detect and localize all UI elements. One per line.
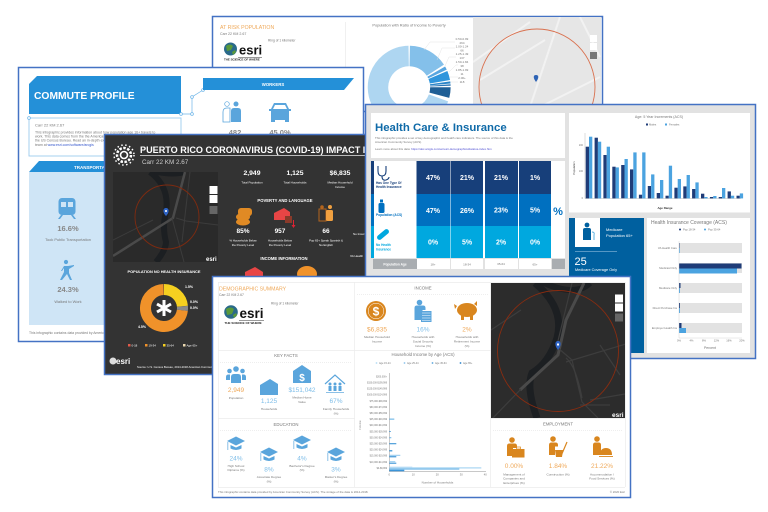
chart: age in 5 year increments: Females — [669, 122, 680, 126]
chart: household income by age: $15,000-$19,999 — [370, 456, 388, 458]
panel: health care and insurance — [366, 104, 756, 358]
chart: household income by age: 0 — [389, 472, 391, 476]
row labels: Health Insurance — [376, 185, 402, 189]
chart: health insurance coverage: 8% — [702, 338, 707, 342]
section: employment: Management of — [503, 472, 525, 476]
footnote: This infographic contains data provided by American Community Survey (ACS). The vintage of the data is 2014-2018. — [218, 490, 369, 494]
chart: household income by age: $100,000-$124,999 — [367, 395, 388, 397]
section: employment: Companies and — [503, 476, 525, 480]
section: education: 4% — [297, 456, 307, 462]
icon: coins — [236, 208, 252, 226]
section: employment: Food Services (%) — [589, 476, 615, 480]
chart: age in 5 year increments — [569, 113, 750, 212]
table footer: population age: 18-34 — [463, 262, 471, 266]
table: coverage by age: 0% — [530, 240, 541, 246]
chart: health insurance coverage: 20% — [739, 338, 745, 342]
section: key facts: 2,949 — [228, 387, 245, 394]
table: coverage by age: 5% — [462, 240, 473, 246]
text box: description: This infographic provides information about how population age 16+ travels to — [35, 130, 155, 134]
section: key facts: KEY FACTS — [274, 353, 298, 358]
text box: description: team at www.esri.com/software/arcgis — [35, 143, 94, 147]
donut labels: 0.0% — [190, 306, 199, 310]
panel: commute profile — [18, 68, 364, 342]
map controls — [210, 186, 218, 214]
map: light basemap — [473, 17, 601, 104]
icon: house income — [245, 267, 263, 280]
stat: spanish: Pop 65+ Speak Spanish & — [309, 238, 343, 242]
section: key facts — [220, 353, 352, 416]
section: employment: Enterprises (%) — [503, 481, 525, 485]
header: health care: Health Care & Insurance — [375, 122, 507, 134]
icon: home value: $ — [299, 373, 305, 384]
section: employment: EMPLOYMENT — [543, 422, 573, 426]
icon: person with document — [414, 300, 432, 322]
chart: household income by age: Age 65+ — [463, 362, 473, 365]
text: ring: Ring of 1 kilometer — [271, 302, 299, 306]
map: dark basemap: esri — [612, 412, 624, 419]
table: coverage by age: 2% — [496, 240, 507, 246]
map: dark basemap — [113, 172, 218, 263]
table: coverage by age: 47% — [426, 175, 441, 182]
chart labels: 1.00-1.24 — [456, 44, 469, 48]
stat: poverty households: % Households Below — [229, 238, 258, 242]
stat: households: 1,125 — [286, 170, 304, 177]
stat: income — [327, 170, 353, 189]
stat: public transportation — [45, 224, 91, 242]
stat: households below: Households Below — [268, 238, 293, 242]
stat: spanish: 66 — [322, 228, 330, 235]
stat: households — [283, 170, 307, 184]
header: health care — [371, 113, 565, 158]
stat: spanish — [309, 228, 343, 247]
chart: health insurance coverage: Pop 18-34 — [683, 228, 696, 232]
section: employment — [493, 422, 623, 485]
chart: age in 5 year increments: 0 — [582, 197, 584, 200]
panel: demographic summary — [212, 276, 630, 498]
icon: family house — [325, 375, 345, 393]
section: employment: 1.84% — [549, 463, 567, 470]
chart labels: 118 — [460, 80, 465, 84]
chart: household income by age: Age 45-64 — [435, 362, 447, 365]
stat: workers: 482 — [229, 128, 241, 137]
heading: coronavirus: PUERTO RICO CORONAVIRUS (COVID-19) IMPACT IN — [140, 145, 372, 155]
chart: health insurance coverage: Pop 35-64 — [708, 228, 721, 232]
icons: graduation caps — [227, 436, 345, 461]
logo: esri: esri — [239, 42, 262, 58]
ribbon: transportation: TRANSPORTATION — [74, 165, 115, 170]
section: education: 8% — [264, 466, 274, 474]
stat: public transportation: 16.6% — [57, 224, 79, 233]
chart: household income by age: Number of Households — [422, 480, 454, 484]
chart: household income by age: 30 — [460, 472, 463, 476]
section: employment: Accommodation / — [590, 472, 614, 476]
section: education: 24% — [229, 456, 243, 462]
section: income — [357, 286, 488, 348]
chart: household income by age: 10 — [412, 472, 415, 476]
stat: income: Median Household — [327, 180, 353, 184]
section: employment: 21.22% — [591, 463, 613, 470]
section: income: Households with — [456, 335, 479, 339]
panel: medicare: Population 65+ — [606, 233, 633, 238]
icon: population — [226, 366, 246, 383]
heading: at risk population: AT RISK POPULATION — [220, 25, 274, 31]
chart title: Population with Ratio of Income to Poverty — [372, 22, 446, 28]
section: income: 16% — [416, 326, 430, 334]
table footer: population age: 18+ — [430, 262, 436, 266]
table footer: population age: Population Age — [383, 262, 407, 266]
chart: health insurance coverage: Medicare Only — [659, 286, 678, 290]
chart: household income by age: 40 — [484, 472, 487, 476]
stat: households: Total Households — [283, 180, 307, 184]
table: coverage by age: 23% — [494, 208, 509, 214]
chart: household income by age: $30,000-$34,999 — [370, 437, 388, 439]
copyright: © 2020 Esri — [610, 490, 625, 494]
logo: esri: THE SCIENCE OF WHERE — [224, 58, 260, 62]
table: coverage by age: % — [553, 206, 563, 218]
section: income: Retirement Income — [454, 340, 480, 344]
logo: esri — [110, 357, 130, 366]
panel: at risk population — [212, 16, 604, 112]
chart labels: 0.50-0.99 — [456, 37, 469, 41]
section: income: Income — [372, 340, 382, 344]
icon: medical star — [157, 300, 171, 316]
table: coverage by age: 0% — [428, 240, 439, 246]
heading: income information: INCOME INFORMATION — [260, 256, 308, 261]
section: education: (%) — [300, 468, 304, 472]
table: coverage by age: 47% — [426, 208, 441, 215]
source note: Source: U.S. Census Bureau, 2014-2018 American Community Survey — [137, 365, 225, 369]
text: location: Carr 22 KM 2.67 — [219, 293, 244, 297]
table footer: population age: 35-64 — [497, 262, 505, 266]
chart labels: 137 — [459, 56, 465, 60]
logo: esri: THE SCIENCE OF WHERE — [224, 321, 262, 325]
section: key facts: Median Home — [292, 396, 312, 400]
header: commute profile: COMMUTE PROFILE — [34, 91, 135, 102]
stat: walked: 24.3% — [57, 285, 79, 294]
stat: poverty households — [229, 228, 258, 247]
text: ring: Ring of 1 kilometer — [268, 38, 296, 42]
icon: elderly person — [583, 223, 594, 240]
chart: health insurance coverage: 16% — [726, 338, 732, 342]
chart: age in 5 year increments: 200 — [579, 144, 584, 147]
text: location: Carr 22 KM 2.67 — [220, 32, 246, 36]
stat: public transportation: Took Public Transportation — [45, 237, 91, 242]
chart: age in 5 year increments: Age Range — [657, 206, 673, 210]
panel: medicare — [569, 218, 644, 353]
section: income: (%) — [465, 344, 469, 348]
stat: households below: the Poverty Level — [269, 243, 292, 247]
icon: accommodation — [593, 436, 613, 457]
donut labels: 1.5% — [185, 285, 194, 289]
table footer: population age — [373, 259, 565, 269]
chart: household income by age: $10,000-$14,999 — [370, 462, 388, 464]
section: key facts: 67% — [329, 398, 343, 405]
footnote: This infographic contains data provided by American Community Survey — [29, 331, 137, 335]
icon: bottle — [378, 200, 384, 213]
chart labels: 264 — [459, 41, 465, 45]
text box: description: work. This data comes from the the American Community Survey which is — [35, 134, 149, 138]
chart: health insurance coverage: Percent — [704, 346, 716, 350]
row labels: Insurance — [376, 248, 391, 252]
table footer: population age: 65+ — [532, 262, 538, 266]
section: education: 3% — [331, 466, 341, 474]
table: coverage by age: 21% — [460, 175, 475, 182]
section: education — [220, 422, 352, 484]
legend: 19-34 — [148, 344, 156, 348]
chart: income to poverty donut — [367, 45, 452, 130]
section: education: Associate Degree — [257, 475, 281, 479]
chart: household income by age: $60,000-$74,999 — [370, 407, 388, 409]
chart: household income by age — [358, 352, 487, 484]
chart: household income by age: Household Income by Age (ACS) — [391, 352, 455, 357]
chart: household income by age: $200,000+ — [376, 376, 388, 378]
chart: household income by age: Income — [358, 420, 362, 430]
row labels: Has One Type Of — [376, 181, 402, 185]
heading: population no health insurance: POPULATION NO HEALTH INSURANCE — [128, 269, 201, 274]
chart: household income by age: Age 15-24 — [379, 362, 391, 365]
chart labels — [424, 37, 469, 84]
section: income: Social Security — [413, 340, 434, 344]
section: income: 2% — [462, 326, 472, 334]
heading: poverty and language: POVERTY AND LANGUAGE — [257, 198, 313, 203]
section: education: EDUCATION — [274, 422, 298, 427]
stat: population: 2,949 — [243, 170, 261, 177]
chart: age in 5 year increments: Age: 5 Year Increments (ACS) — [635, 115, 683, 119]
row labels: No Health — [376, 243, 391, 247]
section: education: High School — [228, 464, 245, 468]
chart labels: 38 — [460, 64, 464, 68]
panel: medicare: 25 — [574, 256, 587, 268]
row labels: Population (ACS) — [376, 213, 402, 217]
section: key facts: Households — [261, 407, 278, 411]
panel: medicare: Medicare — [606, 227, 623, 232]
chart labels: 2.00+ — [458, 76, 466, 80]
chart: household income by age: Age 25-44 — [407, 362, 419, 365]
chart: household income by age: $0-$9,999 — [377, 468, 388, 470]
text: no insurance cut off: No Insurance — [353, 232, 371, 236]
header: commute profile — [29, 76, 181, 114]
header: health care: American Community Survey (ACS). — [375, 140, 422, 144]
chart: health insurance coverage: Medicaid Only — [659, 266, 678, 270]
text box: description: the US Census Bureau. Read an in-depth explanation from the — [35, 138, 132, 142]
icon: piggy income — [297, 266, 317, 282]
legend: Age 65+ — [186, 344, 198, 348]
icon: piggy bank — [454, 301, 477, 320]
ribbon: workers: WORKERS — [262, 82, 284, 87]
table: coverage by age: 21% — [494, 175, 509, 182]
chart: household income by age: $25,000-$29,999 — [370, 444, 388, 446]
map controls — [615, 294, 623, 322]
section: income: INCOME — [414, 286, 432, 290]
chart: age in 5 year increments: Population — [572, 161, 576, 175]
section: income: Median Household — [364, 335, 390, 339]
section: income: Income (%) — [415, 344, 431, 348]
chart: household income by age: $35,000-$39,999 — [370, 431, 388, 433]
donut labels: 4.5% — [138, 325, 147, 329]
section: key facts: Population — [229, 396, 244, 400]
table: coverage by age — [371, 161, 565, 258]
row labels — [376, 181, 402, 252]
stat: spanish: No English — [319, 243, 333, 247]
icon: dollar coin: $ — [373, 304, 380, 318]
chart: health insurance coverage — [647, 218, 750, 353]
chart: household income by age: $125,000-$149,999 — [367, 389, 388, 391]
chart: uninsured donut — [143, 287, 185, 329]
stat: poverty households: the Poverty Level — [232, 243, 255, 247]
section: employment: Construction (%) — [546, 472, 570, 476]
icon: construction — [549, 436, 567, 457]
chart: health insurance coverage: VA Health Care — [658, 246, 677, 250]
header: health care: This infographic provides a set of key demographic and health care indicators. The source of this data is the — [375, 136, 513, 140]
panel: medicare: Medicare Coverage Only — [575, 268, 617, 272]
chart: household income by age: $150,000-$199,999 — [367, 382, 388, 384]
stat: population — [241, 170, 263, 184]
icon: bandage — [376, 228, 390, 241]
header: health care: Learn more about this data: https://doc.arcgis.com/en/esri-demographics/data/us-index.htm — [375, 147, 492, 151]
icon: households — [260, 379, 278, 395]
chart labels: 1.85-1.99 — [456, 68, 469, 72]
icon: car — [269, 103, 291, 122]
chart: household income by age: $75,000-$99,999 — [370, 401, 388, 403]
section: income: $6,835 — [367, 326, 387, 334]
icon: manager — [507, 437, 524, 458]
legend — [128, 344, 198, 348]
section: employment: 0.00% — [505, 463, 523, 470]
chart labels: 1.25-1.49 — [456, 52, 469, 56]
chart: household income by age: $50,000-$59,999 — [370, 413, 388, 415]
stat: population: Total Population — [241, 180, 263, 184]
logo: esri: esri — [240, 306, 264, 321]
chart labels: 66 — [460, 48, 464, 52]
map: dark basemap: esri — [206, 257, 217, 263]
stat: households below: 957 — [275, 228, 286, 235]
chart: health insurance coverage: 12% — [714, 338, 720, 342]
stat: households below — [268, 228, 293, 247]
panel: transportation — [29, 172, 179, 325]
chart: health insurance coverage: Health Insurance Coverage (ACS) — [651, 220, 727, 226]
icon: walker — [60, 260, 74, 280]
section: education: Bachelor's Degree — [289, 464, 315, 468]
logo: esri: esri — [116, 357, 130, 366]
chart: health insurance coverage: Direct Purchase Ins — [653, 306, 678, 310]
table: coverage by age: 5% — [530, 208, 541, 214]
stat: commute: 45.0% — [269, 128, 291, 137]
text: location: Carr 22 KM 2.67 — [142, 159, 189, 166]
chart: household income by age: $40,000-$44,999 — [370, 425, 388, 427]
donut labels — [138, 285, 199, 329]
icon: train — [58, 198, 76, 219]
section: education: Diploma (%) — [227, 468, 245, 472]
chart: household income by age: $45,000-$49,999 — [370, 419, 388, 421]
section: key facts: Value — [298, 400, 306, 404]
stat: walked — [54, 285, 82, 304]
heading: demographic summary: DEMOGRAPHIC SUMMARY — [219, 286, 287, 292]
map: dark basemap — [491, 281, 626, 420]
text box: description: Carr 22 KM 2.67 — [35, 122, 65, 128]
section: key facts: (%) — [334, 412, 338, 416]
stat: poverty households: 85% — [236, 228, 250, 235]
stat: walked: Walked to Work — [54, 299, 82, 304]
donut labels: 0.0% — [190, 300, 199, 304]
chart: household income by age: $20,000-$24,999 — [370, 450, 388, 452]
chart: health insurance coverage: 0% — [677, 338, 682, 342]
ribbon: workers — [203, 78, 354, 90]
ribbon: transportation — [29, 161, 200, 172]
section: key facts: Family Households — [323, 407, 350, 411]
table: coverage by age: 1% — [530, 175, 541, 182]
logo: esri — [224, 305, 264, 325]
icon: stethoscope — [378, 166, 389, 180]
section: income: Households with — [412, 335, 435, 339]
chart: health insurance coverage: 4% — [690, 338, 694, 342]
table: coverage by age: 26% — [460, 208, 475, 215]
connector lines — [28, 89, 204, 119]
chart: age in 5 year increments: 100 — [579, 170, 584, 173]
section: key facts: 1,125 — [261, 398, 278, 405]
chart: household income by age: 20 — [436, 472, 439, 476]
stat: income: Income — [335, 185, 345, 189]
chart: age in 5 year increments: Males — [649, 122, 657, 126]
section: education: Master's Degree — [325, 475, 348, 479]
legend: 35-64 — [166, 344, 174, 348]
chart: health insurance coverage: Employer Health Ins — [652, 326, 678, 330]
logo: esri — [224, 42, 262, 62]
icon: house below poverty — [274, 208, 296, 228]
chart labels: 1.50-1.84 — [456, 60, 469, 64]
icon: people — [223, 102, 241, 122]
text box: description — [29, 118, 181, 156]
text: va health cut off: VA Health — [350, 254, 363, 258]
legend: 0-18 — [132, 344, 138, 348]
icon: virus — [114, 145, 134, 165]
section: education: (%) — [267, 480, 271, 484]
chart labels: 11 — [460, 72, 464, 76]
icon: people language — [319, 205, 333, 221]
stat: income: $6,835 — [330, 170, 351, 177]
section: key facts: $151,042 — [288, 387, 316, 394]
panel: coronavirus impact — [104, 134, 372, 374]
section: education: (%) — [334, 480, 338, 484]
